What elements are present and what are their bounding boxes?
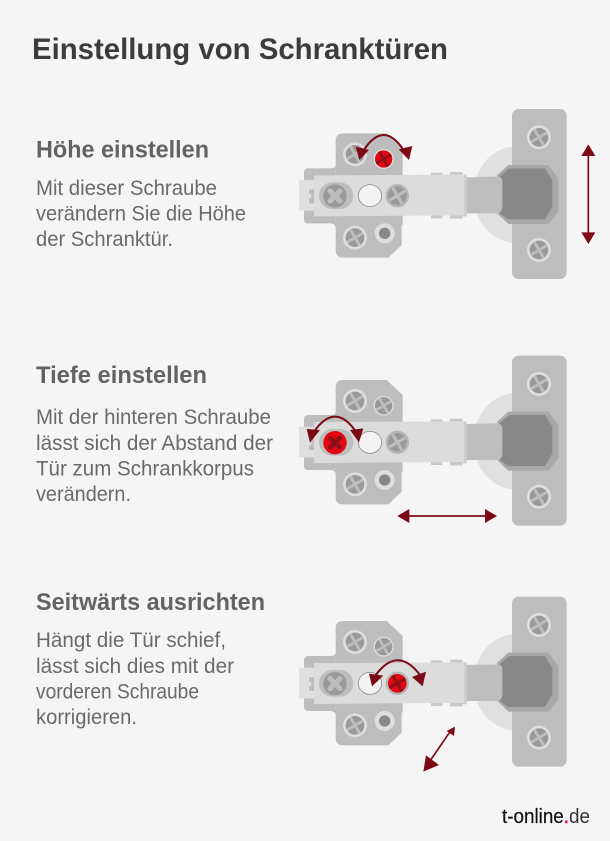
- arrow: rotation: [356, 135, 412, 160]
- text block: Höhe einstellen: Mit dieser Schraube: [36, 177, 217, 200]
- arrow: rotation: [369, 660, 426, 686]
- arrow: vertical height: [581, 144, 595, 244]
- text block: Höhe einstellen: verändern Sie die Höhe: [36, 202, 246, 226]
- arrow: horizontal depth: [397, 509, 497, 523]
- arrow: rotation: [307, 417, 363, 443]
- icon: red sideways screw: [388, 674, 407, 693]
- text block: Seitwärts ausrichten: lässt sich dies mit der: [36, 655, 234, 678]
- heading: Höhe einstellen: Höhe einstellen: [36, 136, 209, 164]
- heading: Seitwärts ausrichten: Seitwärts ausrichten: [36, 589, 265, 616]
- text block: Tiefe einstellen: Tür zum Schrankkorpus: [36, 458, 254, 480]
- text block: Seitwärts ausrichten: Hängt die Tür schief,: [36, 629, 226, 652]
- icon: red depth screw: [323, 431, 347, 454]
- text block: Seitwärts ausrichten: korrigieren.: [36, 706, 137, 729]
- heading: Tiefe einstellen: Tiefe einstellen: [36, 362, 207, 389]
- logo: t-online.de: t-online.de: [502, 806, 590, 828]
- text block: Tiefe einstellen: [36, 406, 273, 506]
- text block: Tiefe einstellen: Mit der hinteren Schraube: [36, 406, 271, 429]
- title: Einstellung von Schranktüren: [32, 33, 448, 66]
- text block: Höhe einstellen: [36, 177, 246, 251]
- arrow: diagonal: [423, 727, 455, 772]
- text block: Höhe einstellen: der Schranktür.: [36, 228, 173, 251]
- text block: Seitwärts ausrichten: [36, 629, 234, 729]
- icon: red height screw: [375, 150, 392, 168]
- text block: Tiefe einstellen: verändern.: [36, 483, 131, 506]
- hinge illustration: depth: [299, 356, 567, 526]
- hinge illustration: sideways: [299, 597, 567, 772]
- text block: Tiefe einstellen: lässt sich der Abstand der: [36, 432, 273, 455]
- text block: Seitwärts ausrichten: vorderen Schraube: [36, 680, 199, 704]
- hinge illustration: height: [299, 109, 595, 279]
